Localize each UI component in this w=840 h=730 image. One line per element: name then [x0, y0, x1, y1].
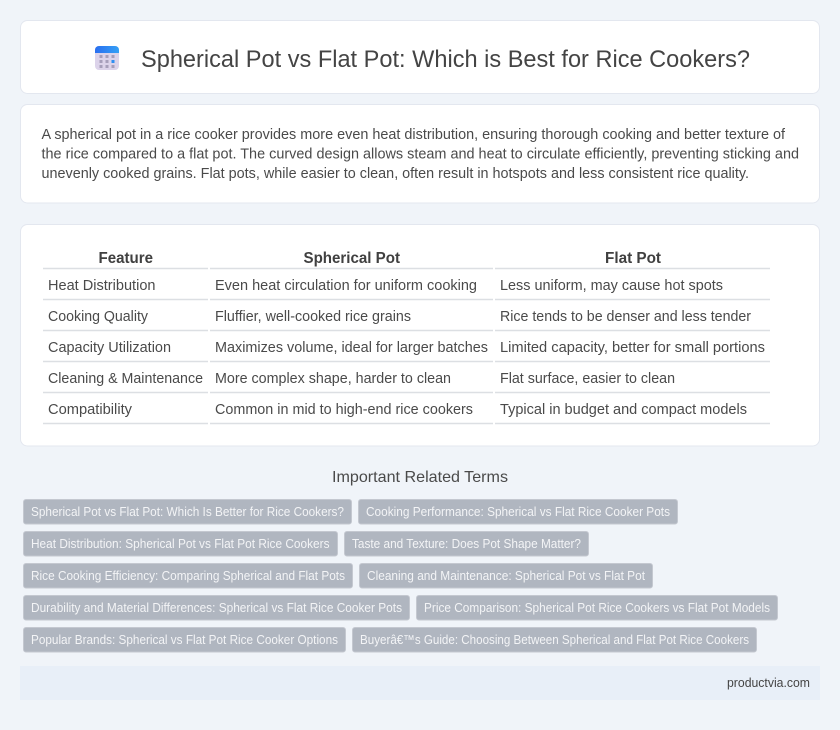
intro text: [42, 126, 799, 182]
row: capacity utilization: Maximizes volume, ideal for larger batches: [215, 339, 488, 356]
row: cleaning and maintenance: Cleaning & Maintenance: [48, 370, 203, 387]
tag: Heat Distribution: Spherical Pot vs Flat Pot Rice Cookers: [31, 536, 330, 551]
intro text: A spherical pot in a rice cooker provides more even heat distribution, ensuring thorough cooking and better texture of: [42, 126, 786, 143]
row: heat distribution: Even heat circulation for uniform cooking: [215, 277, 477, 294]
row: heat distribution: [48, 277, 723, 294]
row: compatibility: Common in mid to high-end rice cookers: [215, 401, 473, 418]
tag: Durability and Material Differences: Spherical vs Flat Rice Cooker Pots: [31, 600, 402, 615]
tag: [24, 532, 338, 556]
row: cooking quality: Fluffier, well-cooked rice grains: [215, 308, 411, 325]
panel: intro paragraph: [20, 104, 820, 203]
row: cleaning and maintenance: More complex shape, harder to clean: [215, 370, 451, 387]
footer bar: [20, 666, 820, 700]
tag: [24, 596, 410, 620]
tag: Cleaning and Maintenance: Spherical Pot vs Flat Pot: [367, 568, 645, 583]
row: capacity utilization: [48, 339, 765, 356]
row: compatibility: Typical in budget and compact models: [500, 401, 747, 418]
tag: [416, 596, 778, 620]
row: cooking quality: Cooking Quality: [48, 308, 148, 325]
table header: Spherical Pot: [304, 250, 401, 267]
tag: Price Comparison: Spherical Pot Rice Cookers vs Flat Pot Models: [424, 600, 770, 615]
footer source text: productvia.com: [727, 676, 810, 690]
tag: [24, 628, 346, 652]
tag: Taste and Texture: Does Pot Shape Matter?: [352, 536, 581, 551]
row: compatibility: Compatibility: [48, 401, 132, 418]
row: cooking quality: [48, 308, 751, 325]
tag: [360, 564, 652, 588]
table header: [98, 250, 662, 267]
tag: [352, 628, 756, 652]
row: heat distribution: Heat Distribution: [48, 277, 156, 294]
related terms tags: [24, 500, 778, 652]
row: cleaning and maintenance: Flat surface, easier to clean: [500, 370, 675, 387]
related terms heading: Important Related Terms: [332, 469, 508, 486]
row: heat distribution: Less uniform, may cause hot spots: [500, 277, 723, 294]
tag: [24, 500, 352, 524]
row: capacity utilization: Capacity Utilization: [48, 339, 171, 356]
table header: Feature: [98, 250, 153, 267]
tag: [358, 500, 678, 524]
tag: [344, 532, 588, 556]
tag: Spherical Pot vs Flat Pot: Which Is Better for Rice Cookers?: [31, 504, 344, 519]
row: capacity utilization: Limited capacity, better for small portions: [500, 339, 765, 356]
header panel: [20, 20, 820, 94]
title: Spherical Pot vs Flat Pot: Which is Best for Rice Cookers?: [141, 46, 750, 73]
row: compatibility: [48, 401, 747, 418]
row: cleaning and maintenance: [48, 370, 675, 387]
tag: Popular Brands: Spherical vs Flat Pot Rice Cooker Options: [31, 632, 338, 647]
intro text: unevenly cooked grains. Flat pots, while easier to clean, often result in hotspots and less consistent rice quality.: [42, 165, 749, 182]
tag: Rice Cooking Efficiency: Comparing Spherical and Flat Pots: [31, 568, 345, 583]
tag: Buyerâ€™s Guide: Choosing Between Spherical and Flat Pot Rice Cookers: [360, 632, 749, 647]
tag: [24, 564, 352, 588]
icon: calendar: [95, 46, 119, 70]
table header: Flat Pot: [605, 250, 662, 267]
tag: Cooking Performance: Spherical vs Flat Rice Cooker Pots: [366, 504, 670, 519]
row: cooking quality: Rice tends to be denser and less tender: [500, 308, 751, 325]
panel: comparison table: [20, 224, 820, 446]
intro text: the rice compared to a flat pot. The curved design allows steam and heat to circulate efficiently, preventing sticking and: [42, 146, 799, 162]
